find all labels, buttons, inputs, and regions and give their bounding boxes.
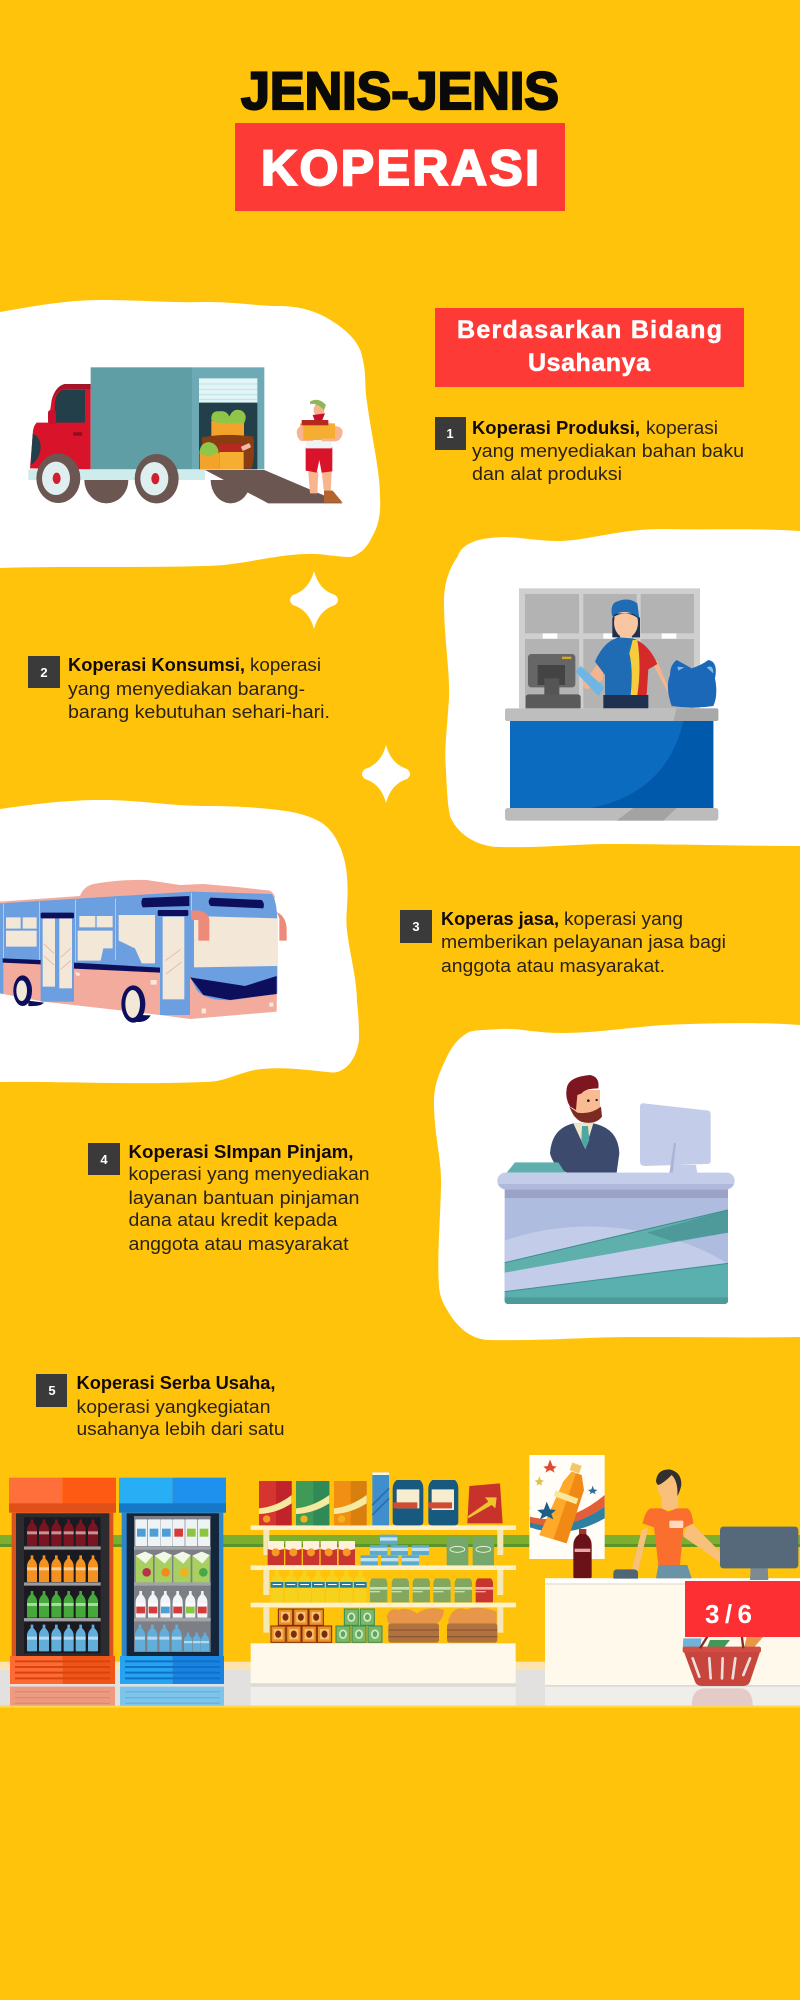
title line: jenis-jenis: JENIS-JENIS	[241, 62, 559, 121]
text block: item 4	[88, 1142, 370, 1254]
badge: page indicator: 3/6	[705, 1599, 752, 1629]
icon: shop assistant	[613, 1469, 722, 1579]
icon: shopping basket	[683, 1635, 763, 1706]
icon: sparkle star 1	[290, 571, 338, 629]
text block: item 4: dana atau kredit kepada	[128, 1210, 339, 1230]
panel: white blob for truck	[0, 300, 380, 568]
badge: number 4	[88, 1143, 120, 1175]
badge: number 2	[28, 656, 60, 688]
callout: section heading	[435, 308, 744, 387]
text block: item 5	[36, 1373, 284, 1439]
icon: checkout monitor	[720, 1527, 798, 1580]
badge: number 1	[435, 417, 466, 450]
text block: item 2	[28, 655, 330, 722]
icon: red drinks fridge	[9, 1478, 116, 1706]
text block: item 3: Koperas jasa,	[441, 909, 559, 929]
text block: item 5: usahanya lebih dari satu	[76, 1419, 284, 1439]
title banner: koperasi: KOPERASI	[261, 140, 539, 196]
badge: number 1: 1	[446, 426, 454, 441]
illustration: bus	[0, 880, 287, 1023]
panel: grocery shelves	[251, 1472, 516, 1687]
illustration: teller at desk	[497, 1075, 735, 1304]
icon: female cashier	[575, 600, 670, 708]
title	[235, 62, 565, 211]
icon: sparkle star 2	[362, 745, 410, 803]
text block: item 5: Koperasi Serba Usaha,	[76, 1373, 276, 1393]
badge: number 3: 3	[412, 919, 420, 934]
text block: item 3: memberikan pelayanan jasa bagi	[441, 932, 726, 952]
text block: item 1: Koperasi Produksi,	[472, 418, 640, 438]
text block: item 3: koperasi yang	[564, 909, 683, 929]
text block: item 1: koperasi	[646, 418, 718, 438]
panel: white blob for teller	[434, 1023, 800, 1340]
text block: item 5: koperasi yangkegiatan	[76, 1397, 270, 1417]
badge: number 5: 5	[48, 1383, 56, 1398]
badge: number 5	[36, 1374, 67, 1407]
title banner: koperasi	[235, 123, 565, 211]
badge: page indicator	[685, 1581, 800, 1637]
text block: item 1: yang menyediakan bahan baku	[472, 441, 744, 461]
illustration: delivery truck with worker	[28, 367, 343, 503]
text block: item 2: koperasi	[250, 655, 321, 675]
illustration: supermarket scene	[0, 1455, 800, 1708]
illustration: cashier at counter	[505, 588, 718, 821]
callout: section heading: Berdasarkan Bidang	[457, 316, 722, 344]
bottom shelf tins and bread	[271, 1608, 497, 1643]
text block: item 4: koperasi yang menyediakan	[128, 1164, 370, 1184]
panel: checkout counter	[545, 1578, 800, 1687]
text block: item 3	[400, 909, 726, 976]
text block: item 4: layanan bantuan pinjaman	[128, 1188, 360, 1208]
badge: number 2: 2	[40, 665, 48, 680]
badge: number 4: 4	[100, 1152, 108, 1167]
text block: item 2: yang menyediakan barang-	[68, 679, 305, 699]
icon: cash register monitor	[526, 654, 581, 708]
top shelf products	[259, 1472, 503, 1525]
icon: bearded man	[550, 1075, 619, 1173]
second shelf products	[268, 1535, 494, 1565]
text block: item 4: anggota atau masyarakat	[128, 1234, 348, 1254]
icon: worker carrying box	[297, 400, 343, 503]
icon: blue drinks fridge	[119, 1478, 226, 1706]
third shelf products	[271, 1571, 493, 1602]
text block: item 4: Koperasi SImpan Pinjam,	[128, 1142, 354, 1162]
panel: white blob for cashier	[444, 529, 800, 847]
text block: item 3: anggota atau masyarakat.	[441, 956, 665, 976]
icon: cola bottle	[573, 1529, 592, 1578]
badge: number 3	[400, 910, 432, 943]
callout: section heading: Usahanya	[528, 349, 651, 377]
text block: item 2: barang kebutuhan sehari-hari.	[68, 702, 330, 722]
panel: white blob for bus	[0, 800, 359, 1083]
text block: item 1	[435, 417, 744, 484]
icon: computer monitor	[640, 1103, 711, 1173]
icon: drink promo poster	[529, 1455, 605, 1559]
text block: item 1: dan alat produksi	[472, 464, 622, 484]
icon: blue shopping bag	[668, 660, 716, 708]
text block: item 2: Koperasi Konsumsi,	[68, 655, 245, 675]
